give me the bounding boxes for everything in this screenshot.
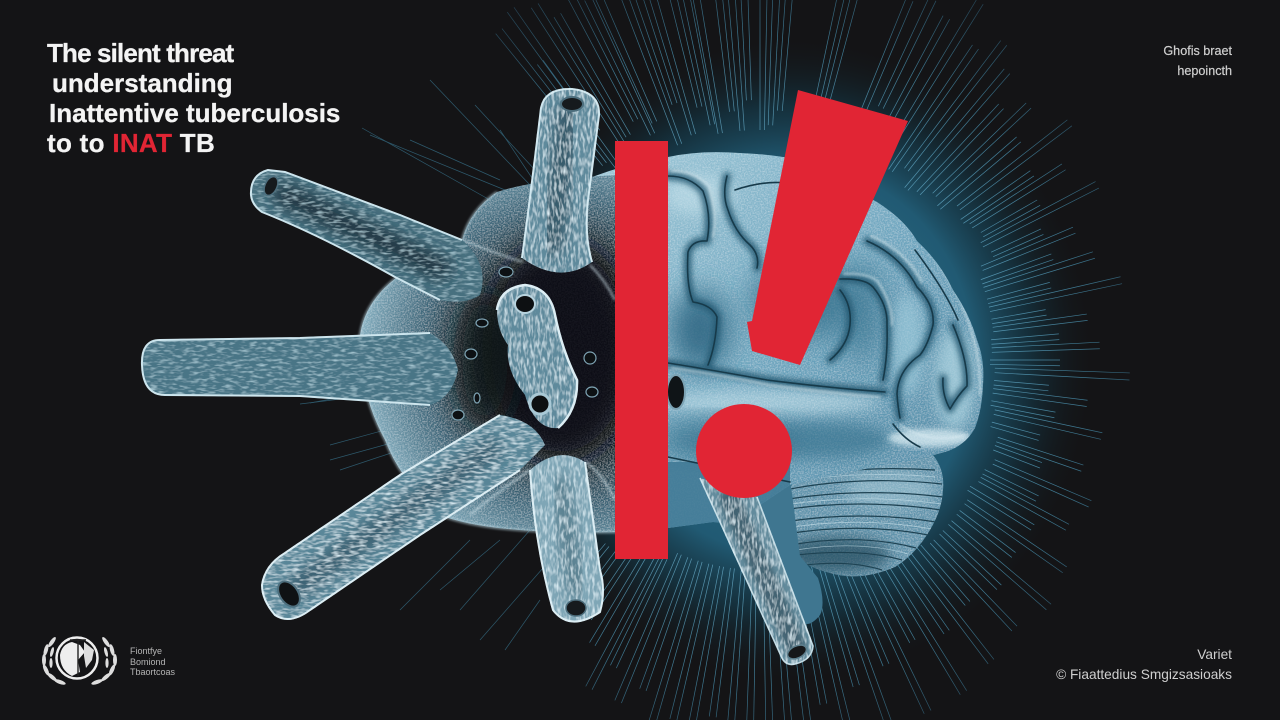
- bacterium: [142, 89, 638, 622]
- red exclamation mark: [696, 90, 908, 498]
- tube opening: descending: [785, 642, 809, 662]
- bottom right credit: [1056, 647, 1232, 682]
- surface pits: [452, 267, 598, 420]
- brain shading: [655, 175, 975, 532]
- tube: upper left: [251, 170, 483, 302]
- tube opening: lower left: [274, 577, 304, 611]
- title: The silent threat: [47, 38, 233, 68]
- bacterium body: [360, 175, 638, 532]
- red bar: [615, 141, 668, 559]
- descending tube in front of brain: [700, 478, 813, 664]
- footer logo caption: [130, 646, 175, 677]
- gyri soft shadow: [668, 176, 967, 418]
- tube opening: bottom: [566, 600, 586, 616]
- exclamation stem: [747, 90, 908, 365]
- exclamation dot: [696, 404, 792, 498]
- tube opening: upper left: [261, 174, 281, 198]
- radial light rays: [488, 0, 1137, 720]
- gyri folds: [668, 176, 967, 482]
- brainstem and finger: [745, 478, 823, 624]
- faint rays on the left of the bacterium: [300, 80, 550, 650]
- top right note: Ghofis braet: [1163, 44, 1232, 58]
- top right note: [1163, 44, 1232, 78]
- background glow behind brain: [480, 30, 1100, 690]
- logo: globe emblem with wreath: [42, 636, 117, 686]
- bottom right credit: Variet: [1197, 647, 1232, 662]
- title: [47, 38, 340, 158]
- small tube opening at red bar: [667, 375, 685, 409]
- cerebrum: [580, 145, 990, 540]
- tube: centre short: [497, 285, 577, 428]
- brain: [580, 145, 990, 624]
- tube: bottom: [530, 455, 603, 622]
- title: to to INAT TB: [47, 128, 215, 158]
- tube: left: [142, 333, 458, 405]
- tube: top: [522, 89, 599, 273]
- cerebellum: [791, 455, 944, 576]
- title: Inattentive tuberculosis: [49, 98, 340, 128]
- top right note: hepoincth: [1177, 64, 1232, 78]
- title: understanding: [52, 68, 233, 98]
- footer logo caption: Bomiond: [130, 656, 166, 666]
- tube: lower left: [262, 415, 545, 619]
- tube opening: top: [561, 97, 583, 111]
- footer logo caption: Tbaortcoas: [130, 667, 175, 677]
- pale fibres around tube bases: [462, 240, 615, 515]
- tube opening: lower centre: [530, 394, 550, 414]
- tube opening: centre short: [515, 295, 535, 313]
- gyri highlights: [672, 171, 980, 438]
- bottom right credit: © Fiaattedius Smgizsasioaks: [1056, 666, 1232, 682]
- footer logo caption: Fiontfye: [130, 646, 162, 656]
